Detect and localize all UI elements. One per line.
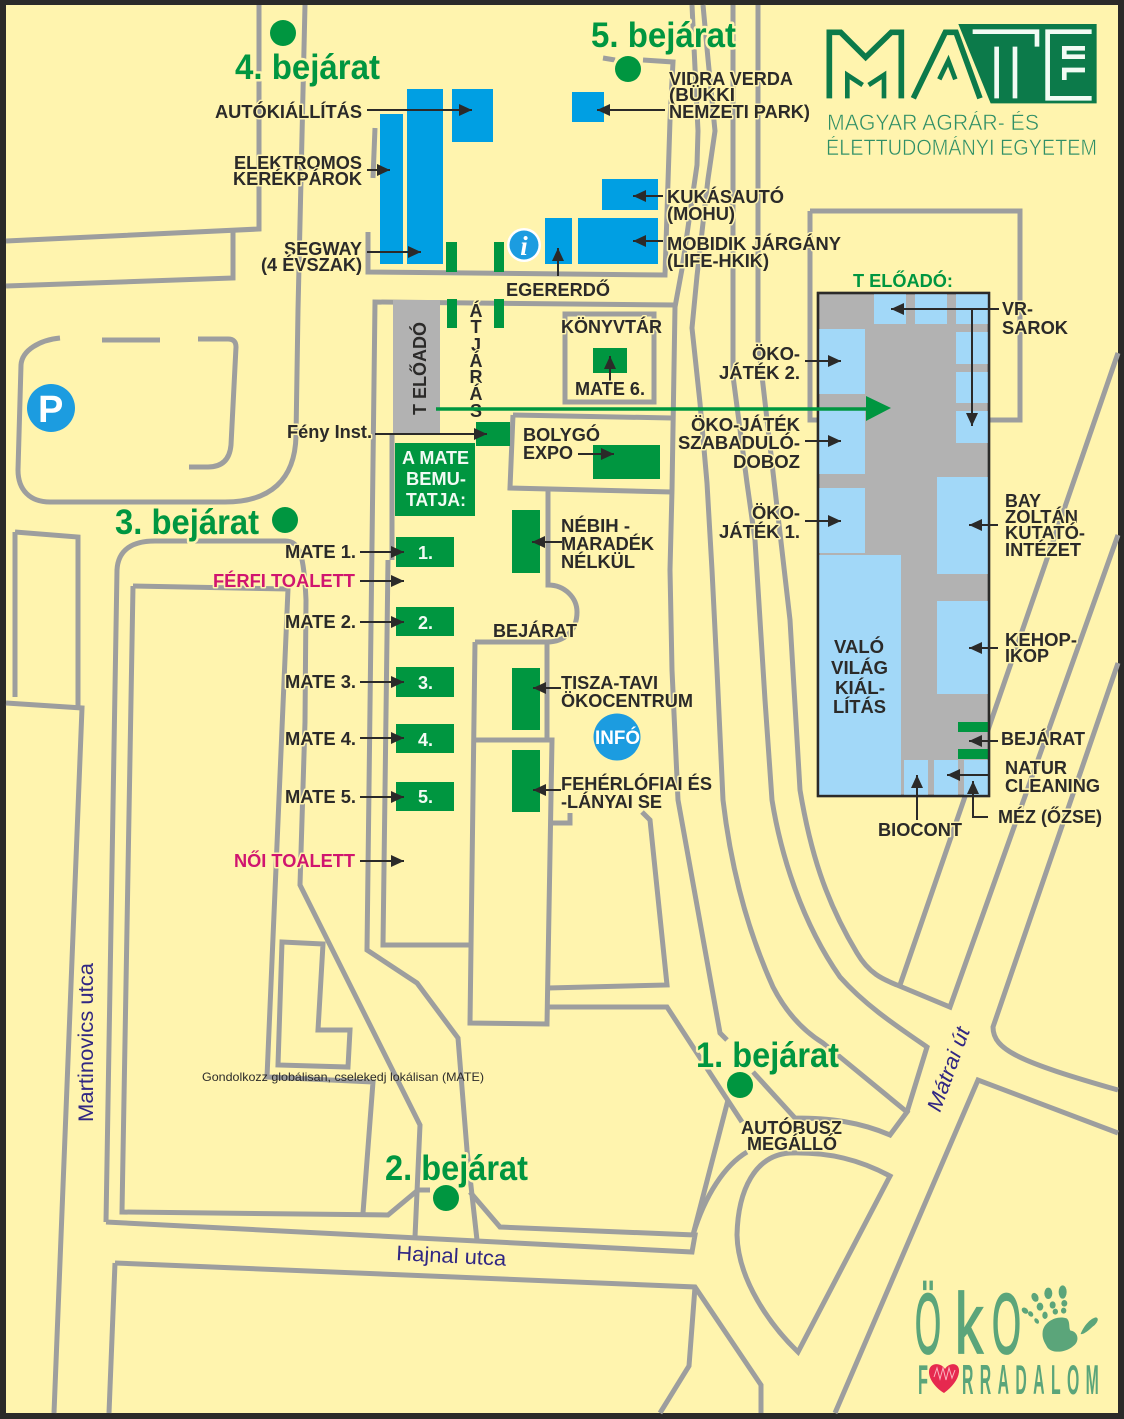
callout: vidra verda	[597, 69, 810, 122]
callout: bejárat: BEJÁRAT	[493, 620, 577, 641]
callout: vr-sarok: SAROK	[1002, 318, 1068, 338]
callout: bay zoltán	[969, 491, 1085, 560]
callout: méz (őzse)	[973, 781, 1102, 827]
callout: mate 6	[575, 356, 645, 399]
callout: fehérlófiai	[533, 773, 712, 812]
callout: bay zoltán: INTÉZET	[1005, 539, 1081, 560]
callout: hall bejárat: BEJÁRAT	[1001, 728, 1085, 749]
callout: mate 4: MATE 4.	[285, 729, 356, 749]
callout: női toalett: NŐI TOALETT	[234, 850, 355, 871]
callout: vr-sarok: VR-	[1002, 299, 1033, 319]
entrance 3: 3. bejárat	[115, 503, 259, 542]
callout: mate 2	[285, 612, 404, 632]
stand 5	[396, 782, 454, 811]
panel: T előadó floor plan	[818, 293, 989, 796]
vertical label: átjárás: Á	[470, 300, 482, 321]
label: való világ kiállítás: KIÁL-	[835, 677, 885, 698]
street name: Hajnal utca: Hajnal utca	[396, 1242, 507, 1271]
callout: öko-játék 2: JÁTÉK 2.	[719, 362, 800, 383]
callout: vr-sarok	[891, 299, 1068, 426]
callout: natur cleaning: NATUR	[1005, 758, 1067, 778]
stand 4	[396, 724, 454, 753]
callout: mate 6: MATE 6.	[575, 379, 645, 399]
green gate markers	[446, 242, 504, 328]
street name: Mátrai út: Mátrai út	[923, 1023, 975, 1115]
callout: elektromos kerékpárok: ELEKTROMOS	[234, 153, 362, 173]
logo text: Magyar Agrár- és Élettudományi Egyetem: ÉLETTUDOMÁNYI EGYETEM	[826, 135, 1097, 160]
callout: autóbusz megálló: AUTÓBUSZ	[741, 1117, 842, 1138]
callout: vidra verda: (BÜKKI	[669, 85, 735, 105]
logo word: Öko: k	[955, 1277, 983, 1372]
entrance 4: 4. bejárat	[235, 48, 380, 87]
callout: bay zoltán: ZOLTÁN	[1005, 506, 1078, 527]
label: való világ kiállítás: VILÁG	[831, 657, 888, 678]
grey T előadó hall	[393, 300, 440, 435]
entrance 4	[235, 20, 380, 87]
vertical label: átjárás: S	[470, 401, 482, 421]
street name: Martinovics utca: Martinovics utca	[75, 963, 98, 1122]
callout: segway: SEGWAY	[284, 239, 362, 259]
logo text: Magyar Agrár- és Élettudományi Egyetem	[826, 110, 1097, 160]
stand 3	[396, 667, 454, 697]
callout: férfi toalett: FÉRFI TOALETT	[213, 570, 355, 591]
callout: kehop-ikop: KEHOP-	[1005, 630, 1077, 650]
callout: mobidik járgány	[633, 233, 841, 271]
callout: biocont: BIOCONT	[878, 820, 962, 840]
callout: bolygó expo: EXPO	[523, 443, 573, 463]
callout: egererdő: EGERERDŐ	[506, 279, 610, 300]
callout: öko-játék szabaduló-doboz: ÖKO-JÁTÉK	[691, 414, 800, 435]
callout: mate 3: MATE 3.	[285, 672, 356, 692]
stand 5: 5.	[418, 787, 433, 807]
callout: nébih: MARADÉK	[561, 533, 654, 554]
icon: parking: P	[38, 389, 63, 431]
callout: nébih: NÉBIH -	[561, 515, 630, 536]
green stands: central area	[476, 348, 660, 812]
callout: nébih	[532, 515, 654, 572]
entrance 1	[696, 1036, 839, 1101]
logo text: Magyar Agrár- és Élettudományi Egyetem: MAGYAR AGRÁR- ÉS	[827, 110, 1039, 135]
entrance 2	[385, 1149, 528, 1214]
vertical label: átjárás	[470, 300, 482, 421]
callout: mate 3	[285, 672, 404, 692]
callout: vidra verda: NEMZETI PARK)	[669, 102, 810, 122]
callout: elektromos kerékpárok	[233, 153, 390, 189]
callout: öko-játék szabaduló-doboz: SZABADULÓ-	[678, 432, 800, 453]
logo word: Forradalom: RRADALOM	[962, 1356, 1105, 1403]
callout: öko-játék 1	[719, 503, 841, 542]
callout: autóbusz megálló	[741, 1117, 842, 1154]
callout: fehérlófiai: FEHÉRLÓFIAI ÉS	[561, 773, 712, 794]
callout: bolygó expo	[523, 424, 614, 463]
callout: kehop-ikop: IKOP	[1005, 646, 1049, 666]
callout: natur cleaning: CLEANING	[1005, 776, 1100, 796]
icon: heart	[929, 1364, 959, 1393]
arrow: green route to T előadó	[436, 396, 891, 421]
logo: MATE	[829, 24, 1097, 103]
callout: kukásautó: KUKÁSAUTÓ	[667, 186, 784, 207]
callout: könyvtár: KÖNYVTÁR	[561, 316, 662, 337]
callout: mate 2: MATE 2.	[285, 612, 356, 632]
callout: mate 5: MATE 5.	[285, 787, 356, 807]
callout: vidra verda: VIDRA VERDA	[669, 69, 793, 89]
callout: öko-játék szabaduló-doboz	[678, 414, 841, 472]
logo: ÖkoForradalom: O	[992, 1277, 1021, 1372]
callout: egererdő	[506, 248, 610, 300]
callout: nébih: NÉLKÜL	[561, 551, 635, 572]
callout: fehérlófiai: -LÁNYAI SE	[561, 791, 662, 812]
icon: parking	[27, 384, 75, 432]
callout: hall bejárat	[969, 728, 1085, 749]
panel: A MATE bemutatja: TATJA:	[406, 490, 466, 510]
callout: mate 1	[285, 542, 404, 562]
callout: kukásautó	[633, 186, 784, 224]
label: való világ kiállítás: LÍTÁS	[833, 696, 886, 717]
callout: tisza-tavi ökocentrum: ÖKOCENTRUM	[561, 691, 693, 711]
vertical label: átjárás: R	[470, 367, 482, 387]
stand 1: 1.	[418, 543, 433, 563]
callout: segway	[261, 239, 421, 275]
logo word: Öko	[915, 1277, 1021, 1372]
callout: öko-játék 1: ÖKO-	[752, 503, 800, 523]
vertical label: átjárás: Á	[470, 383, 482, 404]
logo word: Öko: Ö	[915, 1277, 941, 1372]
blue exhibition blocks: northern area	[380, 89, 658, 264]
vertical label: átjárás: J	[471, 335, 481, 355]
stand 2	[396, 607, 454, 636]
callout: méz (őzse): MÉZ (ŐZSE)	[998, 806, 1102, 827]
callout: elektromos kerékpárok: KERÉKPÁROK	[233, 168, 362, 189]
callout: bolygó expo: BOLYGÓ	[523, 424, 600, 445]
grey T előadó hall: T ELŐADÓ	[409, 322, 430, 415]
stand 3: 3.	[418, 673, 433, 693]
callout: fény inst: Fény Inst.	[287, 422, 372, 442]
vertical label: átjárás: Á	[470, 350, 482, 371]
callout: tisza-tavi ökocentrum: TISZA-TAVI	[561, 673, 658, 693]
icon: information	[507, 228, 541, 262]
heading: T előadó: T ELŐADÓ:	[853, 270, 953, 291]
stand 2: 2.	[418, 613, 433, 633]
callout: kukásautó: (MOHU)	[667, 204, 735, 224]
entrance 1: 1. bejárat	[696, 1036, 839, 1075]
callout: öko-játék 2: ÖKO-	[752, 344, 800, 364]
callout: mate 1: MATE 1.	[285, 542, 356, 562]
stand 4: 4.	[418, 730, 433, 750]
callout: öko-játék 2	[719, 344, 841, 383]
vertical label: átjárás: T	[470, 317, 482, 337]
icon: info point	[594, 714, 640, 760]
icon: info point: INFÓ	[595, 727, 640, 749]
panel: A MATE bemutatja: BEMU-	[406, 469, 466, 489]
callout: mobidik járgány: MOBIDIK JÁRGÁNY	[667, 233, 841, 254]
callout: mobidik járgány: (LIFE-HKIK)	[667, 251, 769, 271]
entrance 5: 5. bejárat	[591, 16, 736, 55]
callout: biocont	[878, 775, 962, 840]
callout: mate 5	[285, 787, 404, 807]
panel: A MATE bemutatja: A MATE	[402, 448, 469, 468]
callout: tisza-tavi ökocentrum	[533, 673, 693, 711]
stand 1	[396, 537, 454, 567]
callout: mate 4	[285, 729, 404, 749]
callout: bay zoltán: BAY	[1005, 491, 1041, 511]
callout: autóbusz megálló: MEGÁLLÓ	[747, 1133, 837, 1154]
callout: autókiállítás: AUTÓKIÁLLÍTÁS	[215, 101, 362, 122]
logo: ÖkoForradalom	[915, 1277, 1105, 1403]
label: való világ kiállítás	[831, 636, 888, 717]
callout: natur cleaning	[947, 758, 1100, 796]
callout: öko-játék szabaduló-doboz: DOBOZ	[733, 452, 800, 472]
icon: hand print	[1020, 1285, 1098, 1352]
callout: segway: (4 ÉVSZAK)	[261, 254, 362, 275]
callout: öko-játék 1: JÁTÉK 1.	[719, 521, 800, 542]
logo word: Forradalom: F	[918, 1356, 928, 1403]
callout: kehop-ikop	[969, 630, 1077, 666]
entrance 2: 2. bejárat	[385, 1149, 528, 1188]
icon: information: i	[520, 231, 528, 261]
callout: bay zoltán: KUTATÓ-	[1005, 522, 1085, 543]
panel: A MATE bemutatja	[395, 443, 475, 516]
slogan: Gondolkozz globálisan, cselekedj lokálisan (MATE)	[202, 1070, 484, 1084]
entrance 5	[591, 16, 736, 85]
label: való világ kiállítás: VALÓ	[834, 636, 884, 657]
